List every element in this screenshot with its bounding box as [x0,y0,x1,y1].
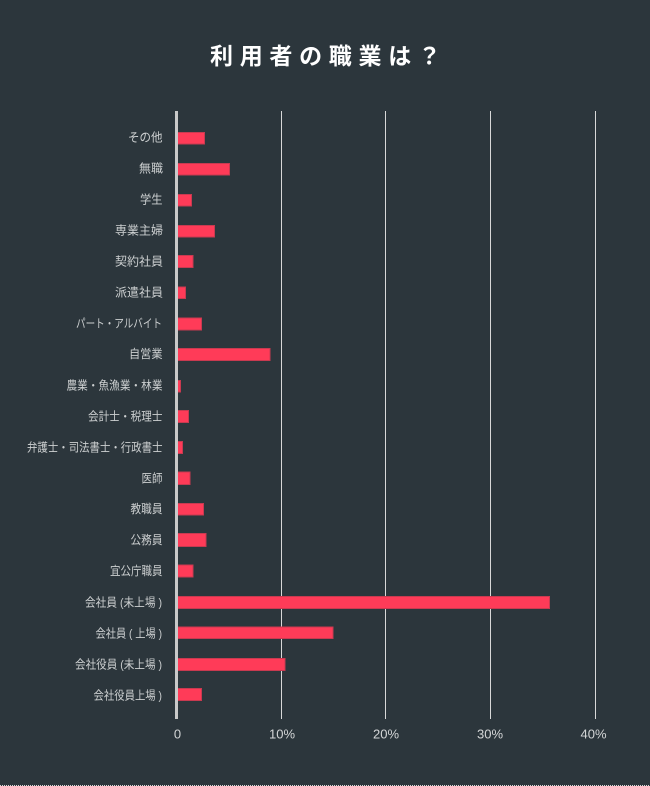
x axis labels: 10% [269,726,295,742]
category labels: 無職 [139,160,163,176]
category labels: 会社員 ( 上場 ) [96,626,162,640]
category labels [27,130,163,702]
category labels: 弁護士・司法書士・行政書士 [27,440,162,454]
x axis labels: 30% [477,726,503,742]
x axis labels: 0 [174,726,181,742]
category labels: 会社役員 (未上場 ) [75,656,162,672]
category labels: 医師 [142,472,162,486]
category labels: パート・アルバイト [76,316,162,330]
category labels: その他 [128,130,162,144]
bars [178,132,550,700]
x axis labels: 40% [580,726,607,742]
category labels: 会社員 (未上場 ) [85,594,162,610]
category labels: 契約社員 [115,254,163,268]
y axis [175,111,178,719]
category labels: 派遣社員 [115,284,163,300]
x axis labels: 20% [373,726,399,742]
category labels: 学生 [140,192,162,206]
category labels: 公務員 [130,533,162,547]
category labels: 専業主婦 [115,222,163,238]
title: 利用者の職業は？ [210,43,448,69]
category labels: 農業・魚漁業・林業 [66,378,162,392]
category labels: 宜公庁職員 [110,564,162,578]
bar chart [27,111,607,742]
category labels: 自営業 [129,347,162,361]
x axis labels [174,726,607,742]
category labels: 会社役員上場 ) [94,688,162,702]
category labels: 会計士・税理士 [88,408,162,424]
category labels: 教職員 [130,501,162,516]
